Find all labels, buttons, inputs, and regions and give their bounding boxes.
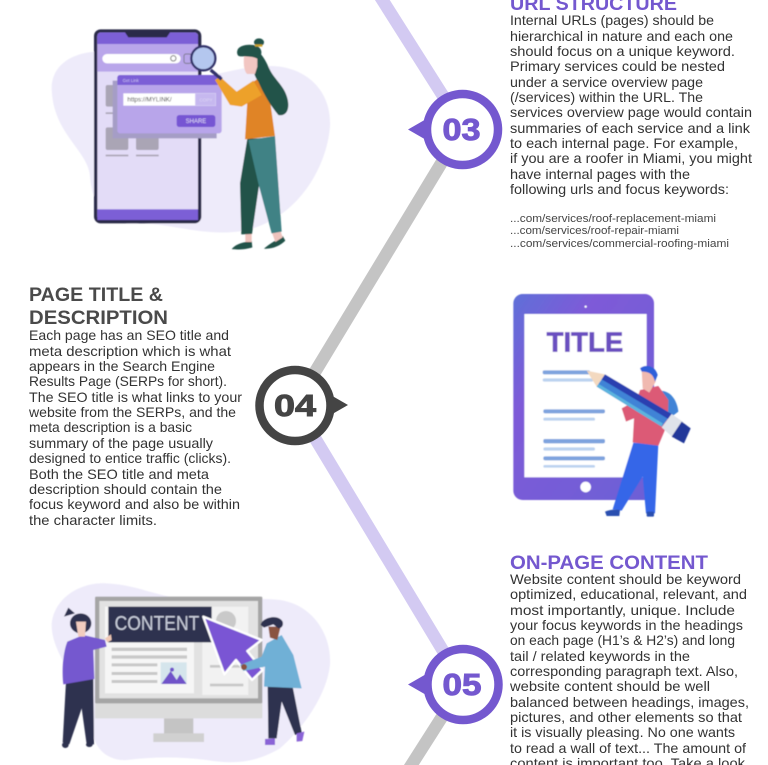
badge 04: 04 xyxy=(274,388,317,423)
badge 04 xyxy=(260,370,348,441)
paragraph: on-page content: tail / related keywords in the xyxy=(510,649,690,664)
illustration: tablet with man and pencil xyxy=(513,294,691,517)
get link dialog: COPY xyxy=(199,97,213,102)
paragraph: URL structure: should focus on a unique keyword. xyxy=(510,44,735,59)
paragraph: on-page content: website content should be well xyxy=(509,679,710,694)
man xyxy=(605,366,678,517)
paragraph: URL structure: hierarchical in nature and each one xyxy=(510,29,733,44)
illustration: phone with woman and magnifier xyxy=(52,29,330,249)
paragraph: on-page content: pictures, and other elements so that xyxy=(510,710,742,725)
tablet title: TITLE xyxy=(547,326,623,357)
example URLs: ...com/services/roof-replacement-miami xyxy=(510,213,716,225)
paragraph: URL structure xyxy=(510,13,752,197)
paragraph: URL structure: (/services) within the URL. The xyxy=(510,90,703,105)
paragraph: URL structure: have internal pages with the xyxy=(510,167,690,182)
paragraph: URL structure: if you are a roofer in Miami, you might xyxy=(510,151,752,166)
panel: on-page content text xyxy=(509,552,749,765)
badge 05: 05 xyxy=(442,667,482,702)
get link dialog xyxy=(113,75,222,138)
tablet xyxy=(513,294,654,500)
illustration: monitor with two people and cursor xyxy=(52,583,330,762)
content header: CONTENT xyxy=(115,612,200,635)
paragraph: URL structure: under a service overview page xyxy=(510,75,703,90)
paragraph: on-page content: balanced between headings, images, xyxy=(510,695,749,710)
paragraph: URL structure: summaries of each service and a link xyxy=(510,121,750,136)
phone xyxy=(94,29,201,223)
heading: on-page content: ON-PAGE CONTENT xyxy=(510,552,708,574)
paragraph: on-page content xyxy=(509,572,749,765)
paragraph: page title and description: appears in the Search Engine xyxy=(29,359,215,374)
paragraph: on-page content: most importantly, unique. Include xyxy=(510,603,735,618)
monitor xyxy=(95,597,262,742)
paragraph: on-page content: optimized, educational, relevant, and xyxy=(510,587,747,602)
paragraph: on-page content: Website content should be keyword xyxy=(510,572,741,587)
paragraph: URL structure: services overview page would contain xyxy=(510,105,752,120)
paragraph: on-page content: your focus keywords in the headings xyxy=(510,618,743,633)
paragraph: URL structure: Primary services could be nested xyxy=(510,59,725,74)
paragraph: on-page content: it is visually pleasing. No one wants xyxy=(510,725,735,740)
get link dialog: SHARE xyxy=(186,119,206,125)
paragraph: page title and description xyxy=(28,328,242,528)
badge 03 xyxy=(408,94,498,165)
paragraph: URL structure: to each internal page. For example, xyxy=(510,136,738,151)
panel: page title and description text xyxy=(28,284,242,528)
heading: page title and description: DESCRIPTION xyxy=(29,307,168,329)
example URLs: ...com/services/roof-repair-miami xyxy=(510,225,679,237)
paragraph: page title and description: The SEO title is what links to your xyxy=(29,390,242,405)
paragraph: page title and description: designed to entice traffic (clicks). xyxy=(29,451,231,466)
picture thumbnail xyxy=(161,662,187,684)
paragraph: URL structure: Internal URLs (pages) should be xyxy=(510,13,714,28)
cursor arrow xyxy=(203,617,263,680)
badge 05 xyxy=(408,649,498,720)
paragraph: page title and description: summary of the page usually xyxy=(29,436,213,451)
example URLs xyxy=(510,213,729,250)
example URLs: ...com/services/commercial-roofing-miami xyxy=(510,238,729,250)
heading: page title and description xyxy=(29,284,168,329)
paragraph: page title and description: Results Page (SERPs for short). xyxy=(29,374,227,389)
content header xyxy=(108,607,212,642)
heading: page title and description: PAGE TITLE & xyxy=(29,284,163,306)
paragraph: page title and description: description should contain the xyxy=(29,482,222,497)
woman xyxy=(215,38,288,249)
paragraph: page title and description: website from the SERPs, and the xyxy=(28,405,236,420)
badge 03: 03 xyxy=(442,112,480,147)
paragraph: on-page content: corresponding paragraph text. Also, xyxy=(510,664,738,679)
get link dialog: https://MYLINK/ xyxy=(127,96,172,103)
paragraph: page title and description: the character limits. xyxy=(29,513,157,528)
paragraph: URL structure: following urls and focus keywords: xyxy=(510,182,729,197)
paragraph: page title and description: Each page has an SEO title and xyxy=(29,328,229,343)
paragraph: on-page content: on each page (H1’s & H2’s) and long xyxy=(510,633,735,648)
paragraph: on-page content: to read a wall of text... The amount of xyxy=(510,741,746,756)
paragraph: page title and description: focus keyword and also be within xyxy=(29,497,240,512)
panel: URL structure text xyxy=(510,0,752,250)
pencil xyxy=(587,371,691,443)
get link dialog: Get Link xyxy=(123,78,140,83)
paragraph: page title and description: Both the SEO title and meta xyxy=(29,467,209,482)
paragraph: page title and description: meta description which is what xyxy=(29,344,231,359)
timeline connector xyxy=(295,0,464,765)
paragraph: page title and description: meta description is a basic xyxy=(29,420,192,435)
magnifying glass xyxy=(191,46,222,79)
woman left xyxy=(62,608,112,748)
man right xyxy=(240,617,304,745)
